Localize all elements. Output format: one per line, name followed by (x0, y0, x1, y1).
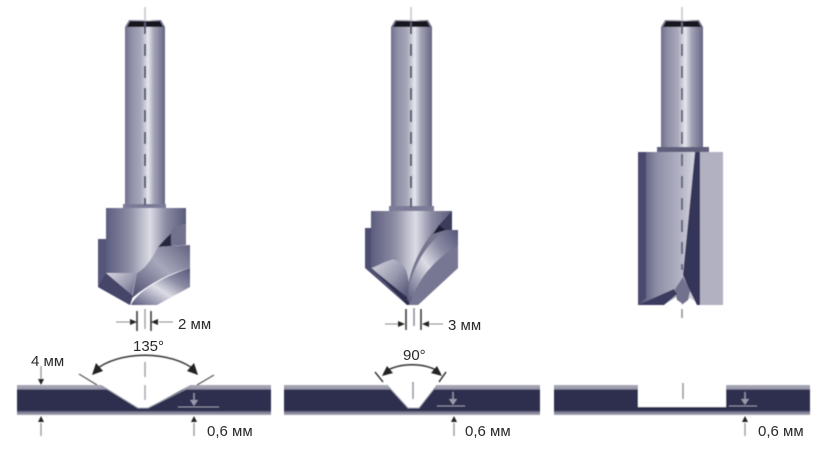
cylinder head (371, 211, 452, 285)
dimension arrows (38, 366, 748, 436)
label: 4 mm: 4 мм (31, 353, 64, 370)
label: 90 degrees: 90° (403, 347, 426, 364)
wings (365, 228, 407, 305)
label: 135 degrees: 135° (133, 338, 164, 355)
shank (391, 20, 432, 207)
angle arc: 135 degrees (79, 355, 214, 385)
straight bit (638, 20, 723, 305)
body (638, 152, 700, 305)
head underlay (371, 211, 458, 305)
cutter bit: 135 degree (98, 20, 190, 305)
wedge (372, 259, 409, 302)
shank (125, 20, 165, 205)
flute upper (407, 230, 458, 302)
label: 2 mm: 2 мм (178, 316, 211, 333)
label: 0,6 mm left: 0,6 мм (207, 423, 253, 440)
label: 3 mm: 3 мм (448, 317, 481, 334)
dark flute (683, 152, 700, 305)
flute lower (131, 268, 190, 305)
plate: 90 degree groove (284, 384, 540, 415)
flute upper (132, 245, 190, 298)
tip (675, 277, 690, 304)
centre lines (145, 7, 683, 400)
right panel (700, 152, 723, 305)
dimension labels (31, 316, 804, 440)
label: 0,6 mm right: 0,6 мм (758, 423, 804, 440)
shank (661, 20, 703, 149)
plate: 135 degree groove (17, 384, 271, 415)
cylinder head (106, 208, 186, 273)
flute dark notch (439, 211, 452, 230)
lower wedge (106, 273, 137, 305)
cutter bit: 90 degree (365, 20, 458, 305)
dimension: 3 mm width (385, 309, 443, 330)
wings (98, 239, 130, 305)
label: 0,6 mm centre: 0,6 мм (465, 423, 511, 440)
dimension: 2 mm width (116, 311, 173, 331)
angle arc: 90 degrees (375, 365, 446, 382)
flute cut (158, 224, 186, 247)
flute lower (408, 246, 458, 305)
plate: straight groove (554, 384, 810, 415)
